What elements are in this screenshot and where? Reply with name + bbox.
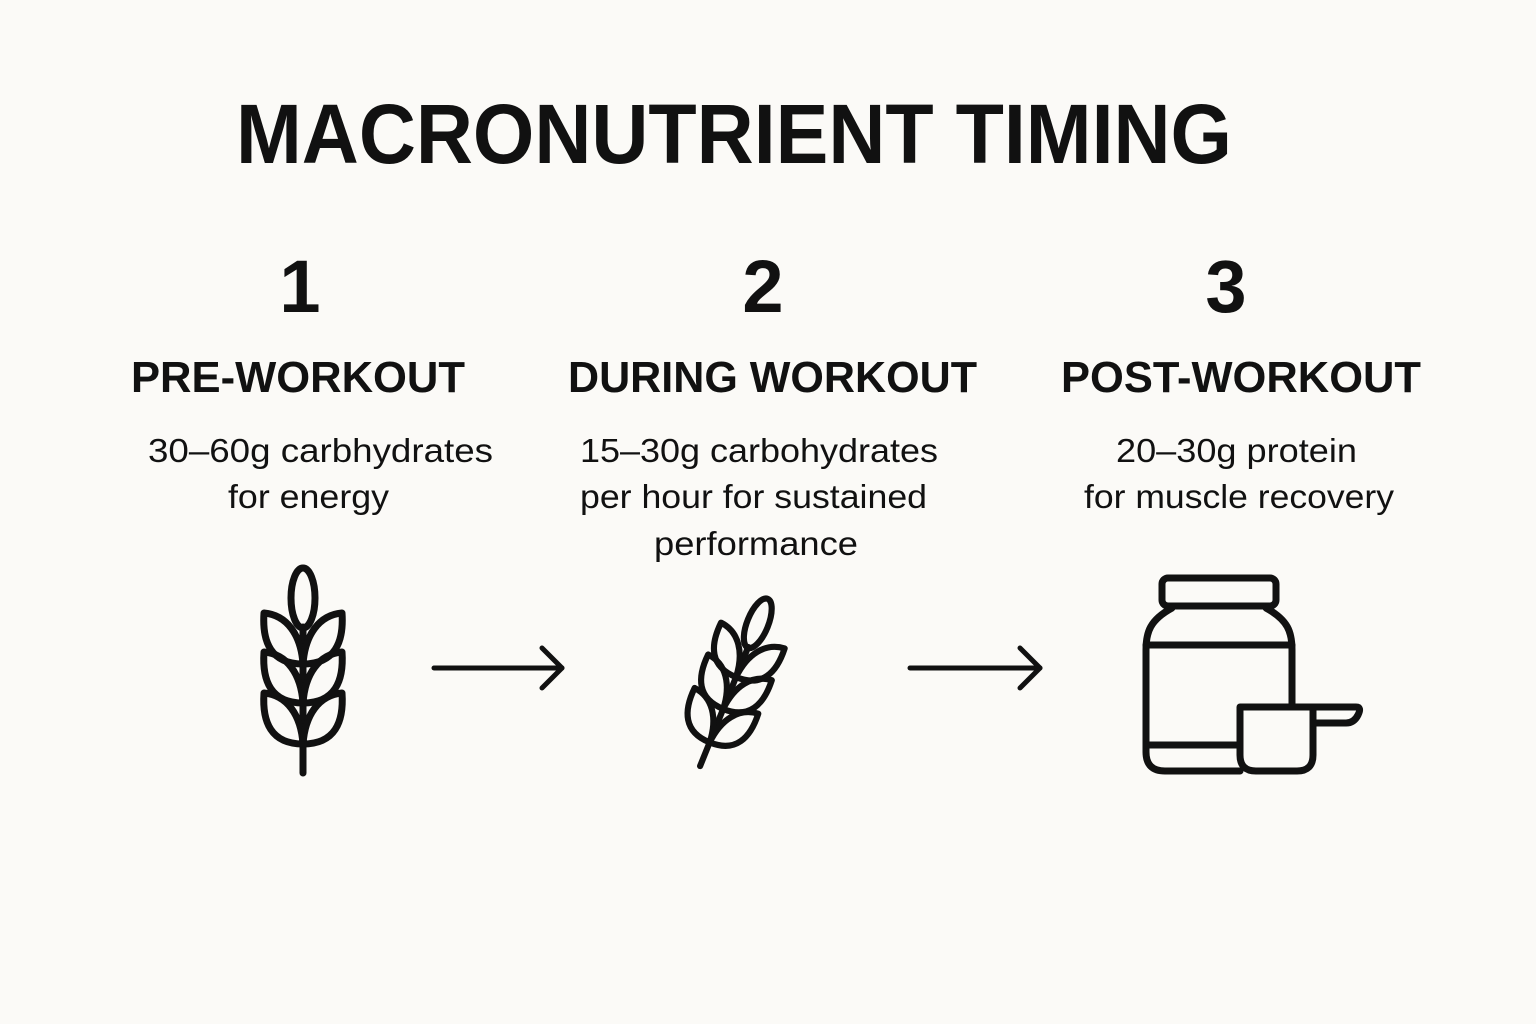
text: pre-workout description: for energy bbox=[228, 478, 390, 515]
text: pre-workout description bbox=[148, 432, 493, 515]
text: post-workout description bbox=[1084, 432, 1395, 515]
text: during workout description: per hour for sustained bbox=[580, 478, 927, 515]
step 2 column bbox=[568, 245, 977, 562]
text: during workout description: 15–30g carbohydrates bbox=[580, 432, 938, 469]
heading: pre-workout: PRE-WORKOUT bbox=[131, 353, 465, 402]
heading: during workout: DURING WORKOUT bbox=[568, 353, 977, 402]
number 3: 3 bbox=[1205, 245, 1247, 328]
icon: wheat (pre-workout) bbox=[264, 568, 342, 773]
text: during workout description: performance bbox=[654, 525, 858, 562]
text: post-workout description: 20–30g protein bbox=[1116, 432, 1357, 469]
text: pre-workout description: 30–60g carbhydrates bbox=[148, 432, 493, 469]
text: during workout description bbox=[580, 432, 938, 562]
number 1: 1 bbox=[279, 245, 321, 328]
number 2: 2 bbox=[742, 245, 784, 328]
icon: protein jar with scoop bbox=[1146, 578, 1360, 771]
heading: post-workout: POST-WORKOUT bbox=[1061, 353, 1421, 402]
arrow 1 bbox=[434, 648, 562, 688]
icon: wheat tilted (during workout) bbox=[668, 586, 800, 779]
text: post-workout description: for muscle recovery bbox=[1084, 478, 1395, 515]
title: MACRONUTRIENT TIMING bbox=[236, 87, 1232, 181]
step 3 column bbox=[1061, 245, 1421, 515]
step 1 column bbox=[131, 245, 493, 515]
arrow 2 bbox=[910, 648, 1040, 688]
